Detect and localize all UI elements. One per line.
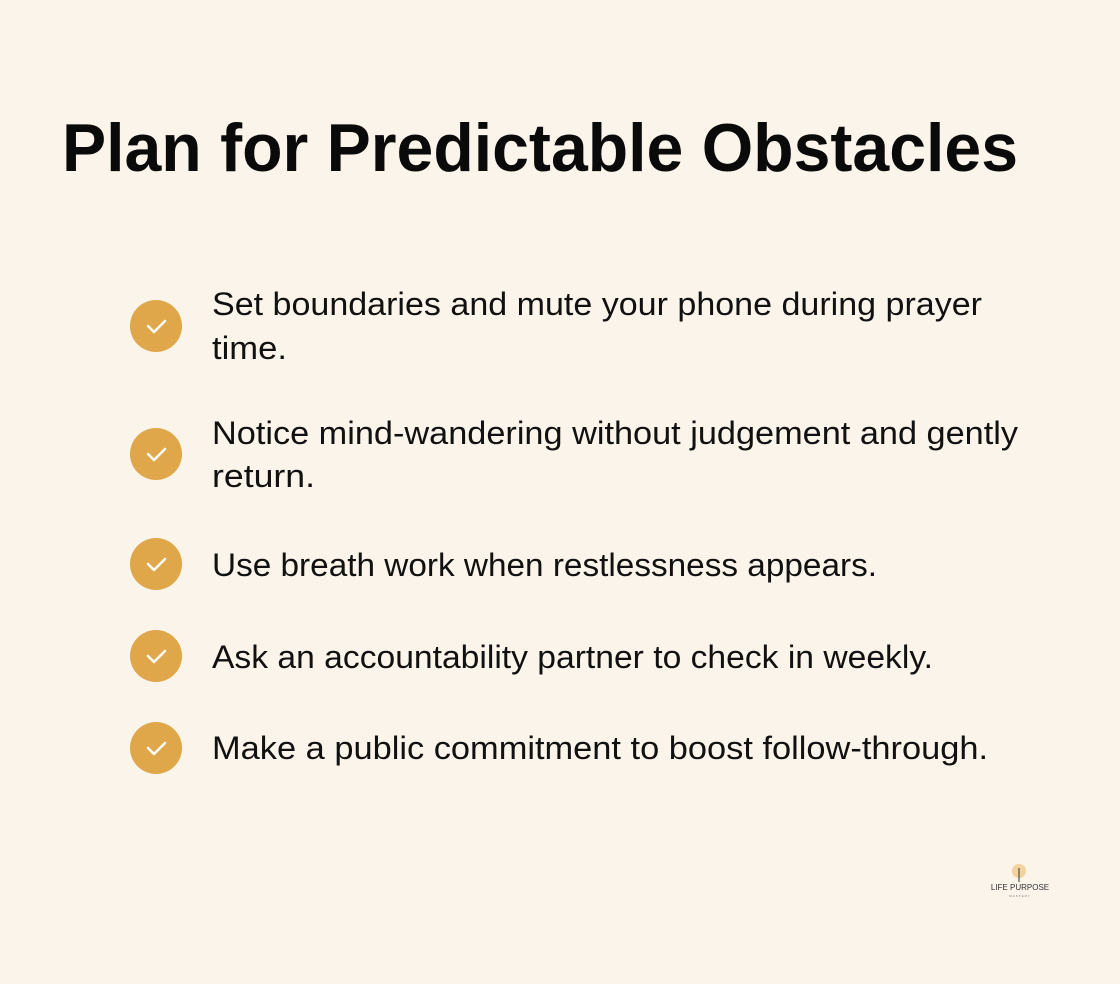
text 1	[212, 286, 982, 366]
text 2	[212, 415, 1018, 494]
icon: check 1	[130, 300, 182, 352]
icon: check 5	[130, 722, 182, 774]
item 2	[130, 415, 1018, 494]
item 4	[130, 630, 933, 682]
icon: check 2	[130, 428, 182, 480]
logo: LIFE PURPOSE	[991, 883, 1049, 892]
icon: check 3	[130, 538, 182, 590]
logo	[991, 864, 1049, 898]
item 3	[130, 538, 877, 590]
text 3: Use breath work when restlessness appears.	[212, 547, 877, 583]
text 1: time.	[212, 330, 287, 366]
text 1: Set boundaries and mute your phone during prayer	[212, 286, 982, 322]
text 2: Notice mind-wandering without judgement and gently	[212, 415, 1018, 451]
icon: check 4	[130, 630, 182, 682]
text 5: Make a public commitment to boost follow-through.	[212, 730, 988, 766]
item 5	[130, 722, 988, 774]
item 1	[130, 286, 982, 366]
text 4: Ask an accountability partner to check in weekly.	[212, 639, 933, 675]
title: Plan for Predictable Obstacles	[62, 110, 1018, 186]
logo: MASTERY	[1009, 894, 1031, 898]
text 2: return.	[212, 458, 315, 494]
